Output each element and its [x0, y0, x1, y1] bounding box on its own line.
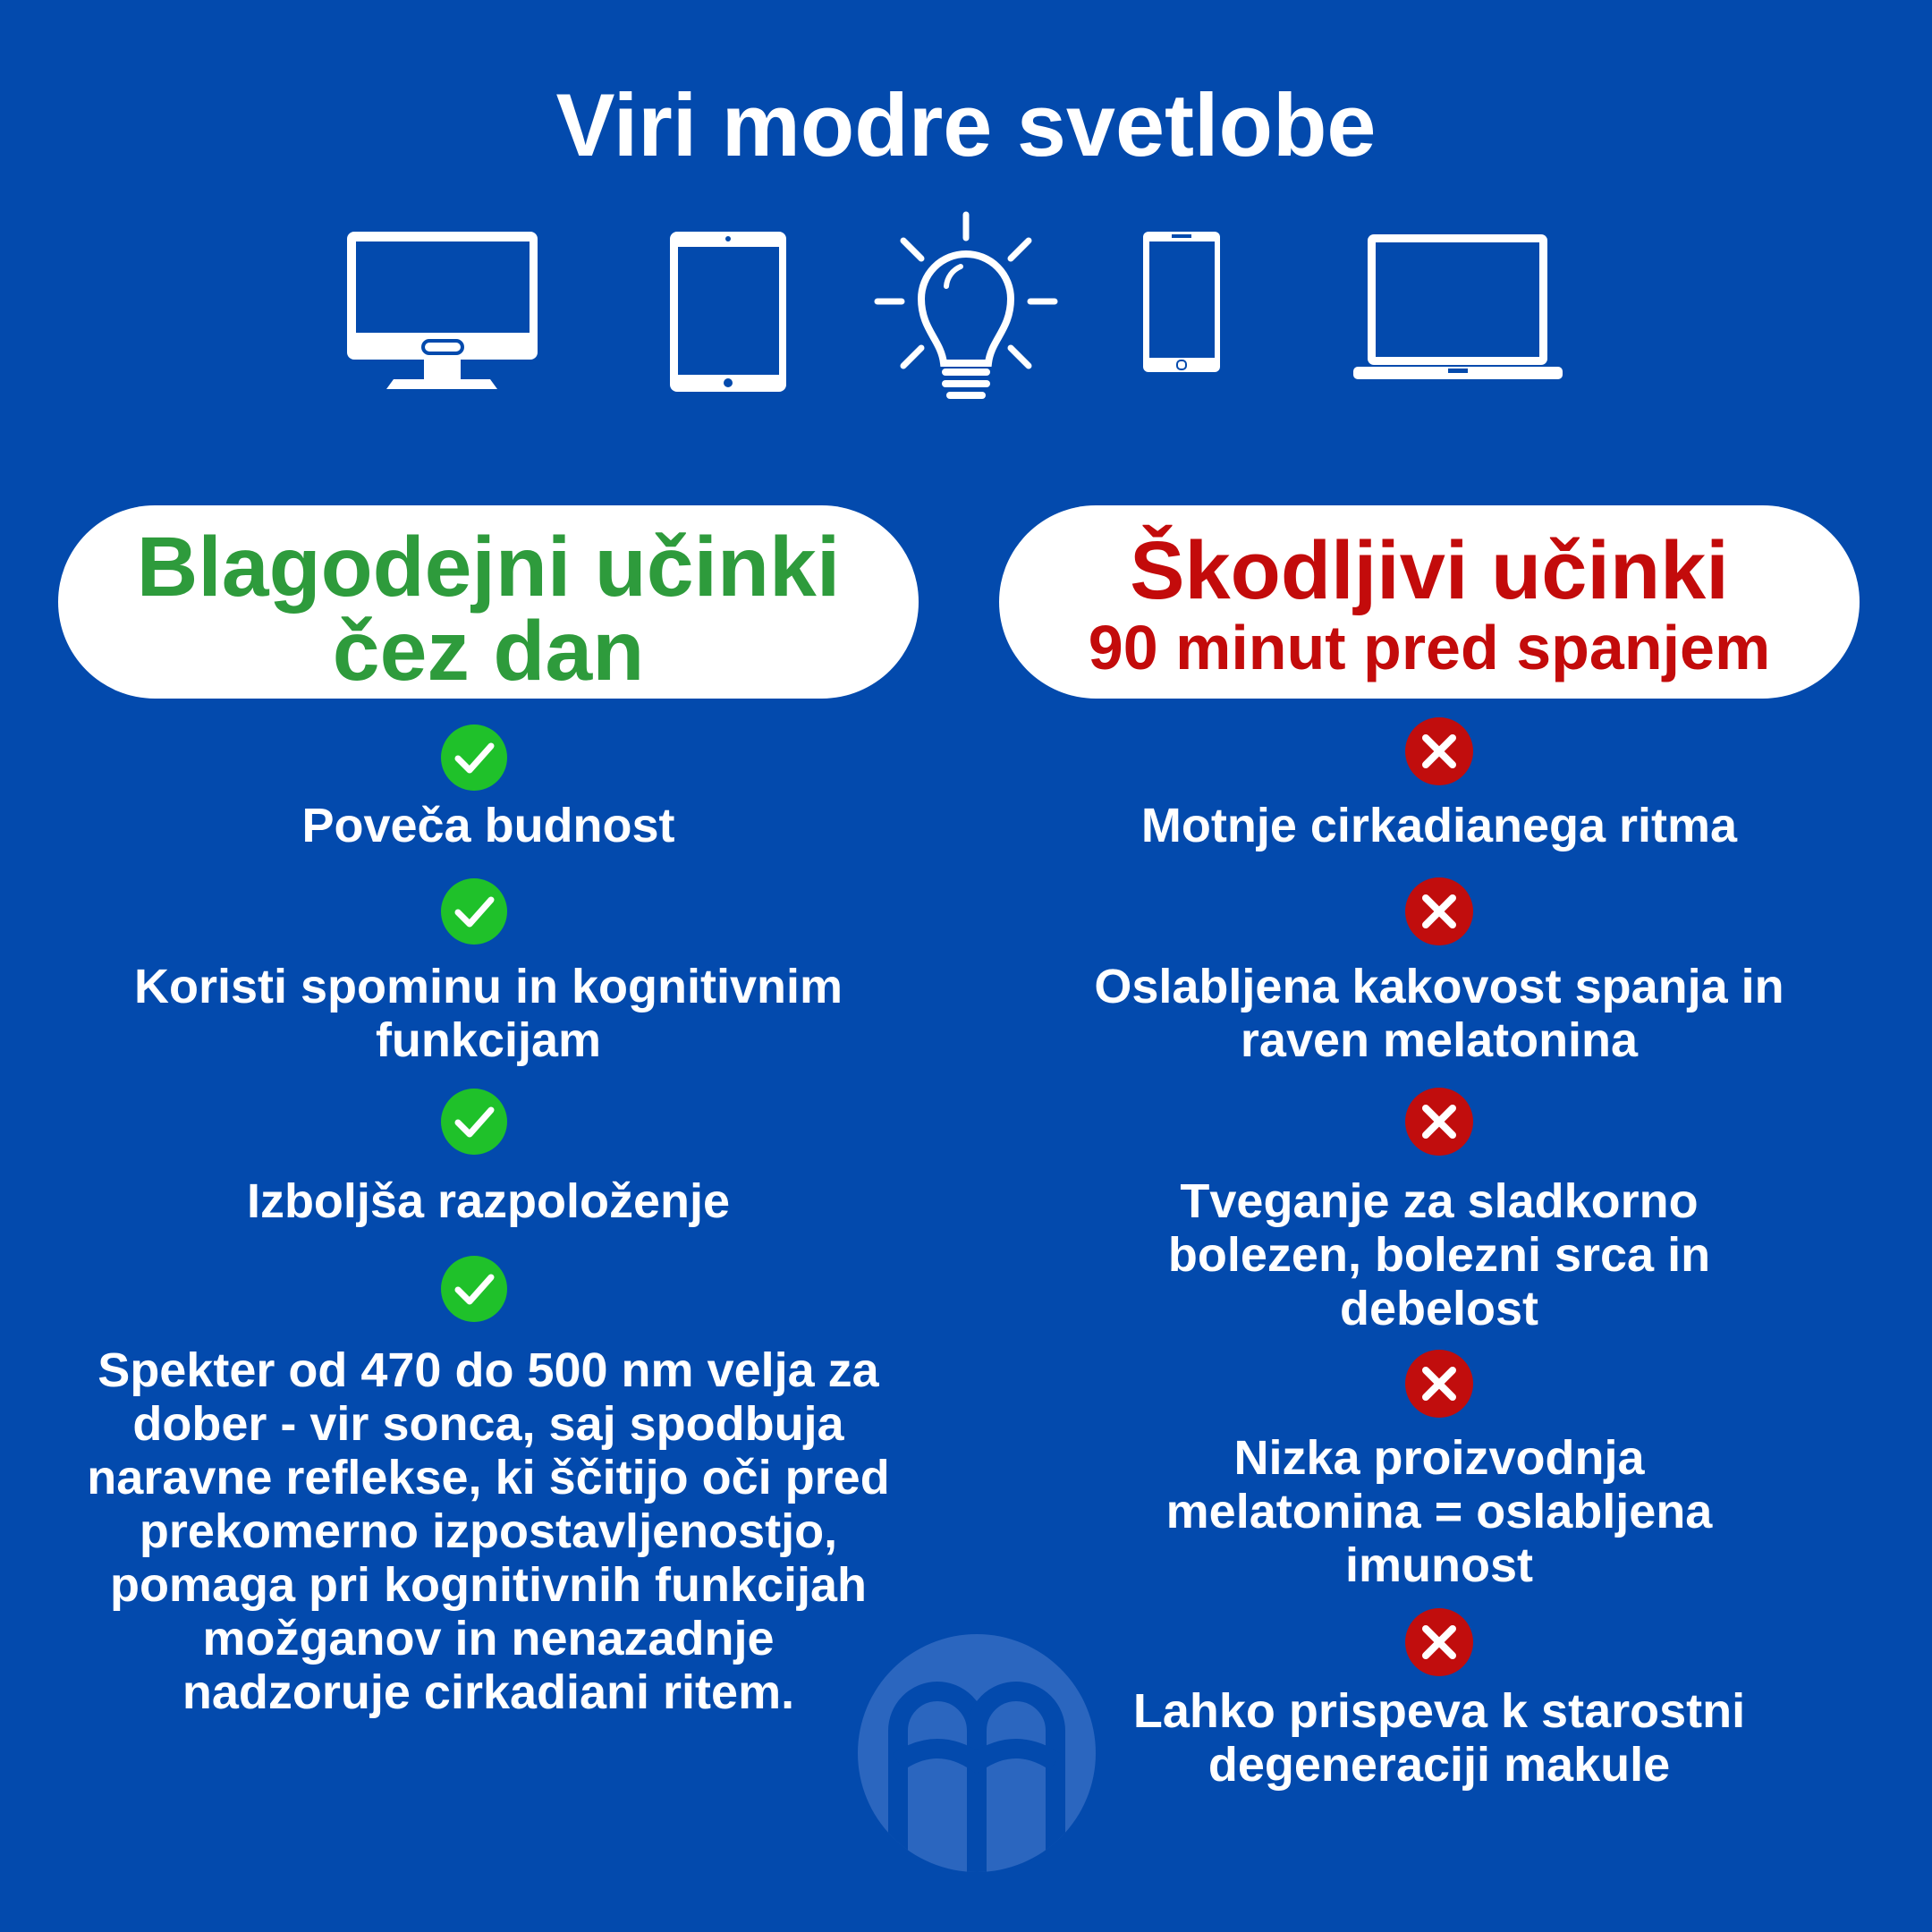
pill: beneficial heading: Blagodejni učinki: [137, 520, 840, 614]
text: Oslabljena kakovost spanja in: [1094, 960, 1784, 1013]
text: Lahko prispeva k starostni: [1133, 1684, 1745, 1738]
pill: harmful heading: [999, 505, 1860, 699]
text: bolezen, bolezni srca in: [1168, 1228, 1710, 1282]
icon: laptop: [1353, 234, 1563, 379]
text: naravne reflekse, ki ščitijo oči pred: [87, 1451, 890, 1504]
left texts: Poveča budnost: [301, 799, 675, 852]
text: debelost: [1340, 1282, 1538, 1335]
text: možganov in nenazadnje: [202, 1612, 775, 1665]
text: Nizka proizvodnja: [1233, 1431, 1645, 1485]
right texts: Motnje cirkadianega ritma: [1141, 799, 1737, 852]
text: melatonina = oslabljena: [1166, 1485, 1712, 1538]
text: Izboljša razpoloženje: [247, 1174, 730, 1228]
pill: beneficial heading: [58, 505, 919, 699]
icon: phone: [1143, 232, 1220, 372]
text: pomaga pri kognitivnih funkcijah: [110, 1558, 867, 1612]
text: imunost: [1345, 1538, 1533, 1592]
title: Viri modre svetlobe: [555, 75, 1376, 174]
pill: beneficial heading: čez dan: [333, 604, 644, 699]
check icons: [441, 724, 507, 1322]
text: raven melatonina: [1241, 1013, 1638, 1067]
icon: light bulb: [877, 215, 1055, 395]
pill: harmful heading: 90 minut pred spanjem: [1089, 613, 1770, 682]
text: Koristi spominu in kognitivnim: [134, 960, 843, 1013]
text: nadzoruje cirkadiani ritem.: [182, 1665, 794, 1719]
text: dober - vir sonca, saj spodbuja: [132, 1397, 844, 1451]
text: Tveganje za sladkorno: [1180, 1174, 1699, 1228]
text: prekomerno izpostavljenostjo,: [140, 1504, 837, 1558]
x icons: [1405, 717, 1473, 1676]
pill: harmful heading: Škodljivi učinki: [1130, 525, 1729, 616]
text: degeneraciji makule: [1208, 1738, 1670, 1792]
text: Spekter od 470 do 500 nm velja za: [97, 1343, 879, 1397]
text: funkcijam: [376, 1013, 601, 1067]
icon: monitor: [347, 232, 538, 389]
icons row: [347, 211, 1563, 399]
logo watermark: [858, 1634, 1096, 1871]
icon: tablet: [670, 232, 786, 392]
